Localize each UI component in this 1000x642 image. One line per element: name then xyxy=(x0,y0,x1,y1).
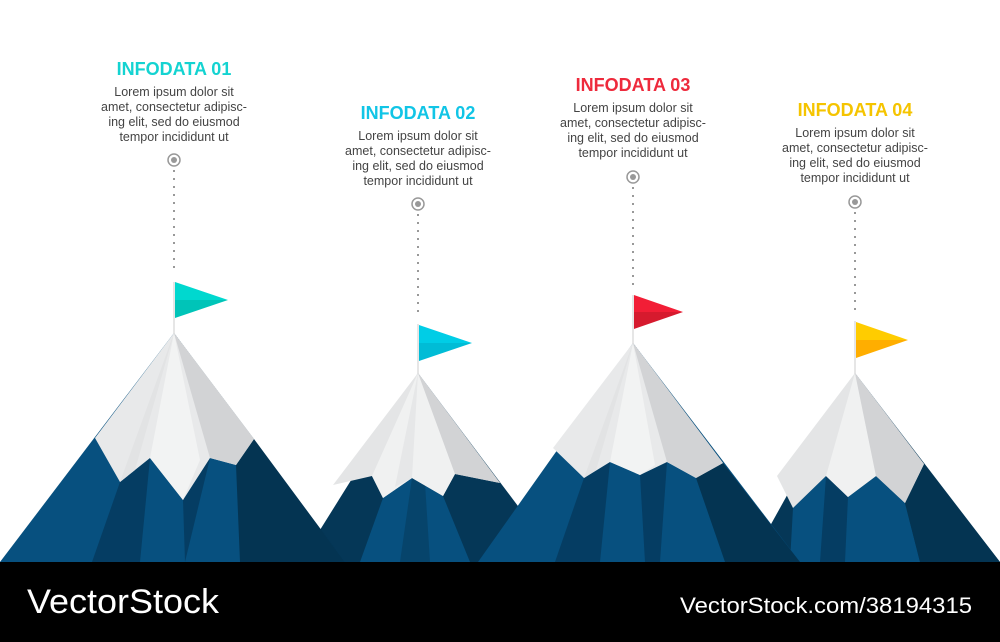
text block 1: INFODATA 01 xyxy=(117,59,231,79)
text block 4 xyxy=(782,100,928,185)
text block 1 xyxy=(101,59,247,144)
text block 3: Lorem ipsum dolor sit xyxy=(573,101,693,115)
text block 3: tempor incididunt ut xyxy=(578,146,688,160)
text block 1: amet, consectetur adipisc- xyxy=(101,100,247,114)
flag 1 xyxy=(174,170,228,334)
text block 2: ing elit, sed do eiusmod xyxy=(352,159,484,173)
mountain 4 xyxy=(750,373,1000,562)
text block 2 xyxy=(345,103,491,188)
text block 4: Lorem ipsum dolor sit xyxy=(795,126,915,140)
text block 3: ing elit, sed do eiusmod xyxy=(567,131,699,145)
flag 4 xyxy=(855,212,908,374)
text block 4: amet, consectetur adipisc- xyxy=(782,141,928,155)
text block 1: tempor incididunt ut xyxy=(119,130,229,144)
footer bar: VectorStock.com/38194315 xyxy=(680,593,972,618)
flag 2 xyxy=(418,214,472,374)
footer bar xyxy=(0,562,1000,642)
footer bar: VectorStock xyxy=(27,583,220,621)
flag 3 xyxy=(633,187,683,344)
text block 1: ing elit, sed do eiusmod xyxy=(108,115,240,129)
mountain 3 xyxy=(478,343,800,562)
mountain 1 xyxy=(0,333,345,562)
text block 2: Lorem ipsum dolor sit xyxy=(358,129,478,143)
text block 2: INFODATA 02 xyxy=(361,103,475,123)
mountain 2 xyxy=(300,373,560,562)
text block 4: tempor incididunt ut xyxy=(800,171,910,185)
text block 2: amet, consectetur adipisc- xyxy=(345,144,491,158)
text block 3: amet, consectetur adipisc- xyxy=(560,116,706,130)
text block 4: INFODATA 04 xyxy=(798,100,912,120)
text block 3: INFODATA 03 xyxy=(576,75,690,95)
marker circles xyxy=(168,154,861,210)
text block 4: ing elit, sed do eiusmod xyxy=(789,156,921,170)
text block 1: Lorem ipsum dolor sit xyxy=(114,85,234,99)
text block 3 xyxy=(560,75,706,160)
text block 2: tempor incididunt ut xyxy=(363,174,473,188)
